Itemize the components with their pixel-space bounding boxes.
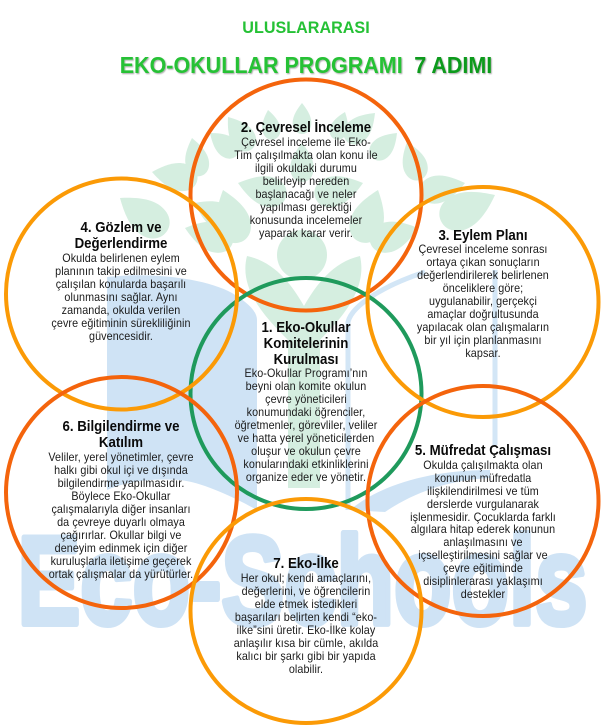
step 5 text: derslerde vurgulanarak (427, 499, 539, 511)
step 5 text: çevre eğitiminde (443, 563, 523, 575)
step 6 text: çalışmalarıyla diğer insanları (51, 504, 191, 516)
step 5 text: içselleştirilmesini sağlar ve (418, 550, 548, 562)
step 4 text (51, 218, 191, 343)
circle ring: step 1 (190, 278, 422, 509)
step 3 text (417, 226, 549, 360)
step 4 text: Okulda belirlenen eylem (62, 253, 180, 265)
step 4 text: güvencesidir. (89, 331, 153, 343)
step 1 text: oluşur ve okulun çevre (251, 446, 361, 458)
step 6 text: halkı gibi okul içi ve dışında (54, 465, 189, 477)
step 3 text: Çevresel inceleme sonrası (418, 244, 548, 256)
step 7 text: başarıları belirten kendi “eko- (235, 612, 377, 624)
background watermark: tree of leaves (110, 103, 503, 488)
step 5 text (410, 441, 556, 601)
step 6 text: bilgilendirme yapılmasıdır. (58, 478, 184, 490)
step 1 text: beyni olan komite okulun (246, 381, 366, 393)
step 7 text: değerlerini, ve öğrencilerin (242, 586, 370, 598)
step 6 text (48, 417, 194, 581)
step 1 text: ve hatta yerel yöneticilerden (238, 433, 374, 445)
step 4 text: çalışılan konularda başarılı (56, 279, 186, 291)
step 5 text: işlenmesidir. Çocuklarda farklı (410, 512, 556, 524)
step 5 text: ilişkilendirilmesi ve tüm (427, 486, 539, 498)
step 1 text: Komitelerinin (264, 334, 348, 351)
step 1 text: çevre yöneticileri (265, 394, 347, 406)
step 2 text: başlanacağı ve neler (255, 189, 357, 201)
step 4 text: Değerlendirme (75, 234, 168, 251)
step 3 text: bir yıl için planlanmasını (424, 335, 542, 347)
step 1 text: Eko-Okullar Programı’nın (245, 368, 367, 380)
step 4 text: zamanda, okulda verilen (62, 305, 180, 317)
step 6 text: Veliler, yerel yönetimler, çevre (48, 452, 194, 464)
step 3 text: kapsar. (465, 348, 501, 360)
step 1 text: öğretmenler, görevliler, veliler (235, 420, 378, 432)
step 1 text (235, 318, 378, 484)
step 6 text: çağırırlar. Okullar bilgi ve (61, 530, 181, 542)
circle ring: step 5 (368, 386, 598, 616)
step 6 text: ortak çalışmalar da yürütürler. (49, 569, 193, 581)
step 2 text: Tim çalışılmakta olan konu ile (234, 150, 378, 162)
title line: ULUSLARARASI: ULUSLARARASI (242, 18, 370, 37)
step 5 text: konunun müfredatla (435, 473, 532, 485)
step 3 text: yapılacak olan çalışmaların (417, 322, 549, 334)
step 1 text: Kurulması (274, 350, 338, 367)
step 2 text (234, 118, 378, 240)
step 3 text: amaçlar doğrultusunda (427, 309, 539, 321)
step 4 text: planının takip edilmesini ve (55, 266, 187, 278)
background watermark: open book (107, 270, 495, 512)
step 3 text: 3. Eylem Planı (438, 226, 528, 243)
circle ring: step 3 (368, 187, 598, 417)
step 1 text: konumundaki öğrenciler, (247, 407, 365, 419)
circle ring: step 4 (6, 178, 237, 410)
step 7 text: elde etmek istedikleri (255, 599, 357, 611)
step 5 text: 5. Müfredat Çalışması (415, 441, 551, 458)
step 7 text: 7. Eko-İlke (273, 554, 339, 571)
step 6 text: kuruluşlarla iletişime geçerek (51, 556, 192, 568)
circle ring: step 2 (190, 80, 422, 310)
step 3 text: uygulanabilir, gerçekçi (429, 296, 537, 308)
step 6 text: Böylece Eko-Okullar (71, 491, 171, 503)
step 1 text: 1. Eko-Okullar (261, 318, 351, 335)
step 1 text: konularındaki etkinliklerini (243, 459, 369, 471)
step 2 text: belirleyip nereden (263, 176, 349, 188)
step 5 text: anlaşılmasını ve (443, 537, 523, 549)
step 6 text: da çevreye duyarlı olmaya (57, 517, 186, 529)
step 5 text: algılara hitap ederek konunun (411, 524, 555, 536)
step 3 text: ortaya çıkan sonuçların (426, 257, 540, 269)
step 1 text: organize eder ve yönetir. (246, 472, 366, 484)
step 3 text: değerlendirilerek belirlenen (417, 270, 549, 282)
circle ring: step 6 (6, 377, 237, 608)
step 5 text: disiplinlerarası yaklaşımı (423, 576, 543, 588)
step 2 text: yapılması gerektiği (260, 202, 352, 214)
step 2 text: Çevresel inceleme ile Eko- (241, 137, 371, 149)
step 3 text: önceliklere göre; (443, 283, 523, 295)
step 2 text: 2. Çevresel İnceleme (241, 118, 371, 135)
step 5 text: destekler (461, 589, 505, 601)
circle ring: step 7 (190, 499, 422, 723)
step 4 text: çevre eğitiminin sürekliliğinin (51, 318, 191, 330)
step 7 text: kalıcı bir şarkı gibi bir yapıda (236, 651, 376, 663)
step 6 text: Katılım (99, 433, 143, 450)
step 4 text: 4. Gözlem ve (81, 218, 162, 235)
step 7 text: ilke”sini üretir. Eko-İlke kolay (237, 624, 376, 637)
step 4 text: olunmasını sağlar. Aynı (64, 292, 178, 304)
step 5 text: Okulda çalışılmakta olan (423, 460, 543, 472)
step 7 text (234, 554, 379, 676)
step 2 text: konusunda incelemeler (250, 215, 362, 227)
step 7 text: anlaşılır kısa bir cümle, akılda (234, 638, 379, 650)
step 2 text: yaparak karar verir. (259, 228, 353, 240)
step 6 text: deneyim edinmek için diğer (55, 543, 188, 555)
step 7 text: Her okul; kendi amaçlarını, (241, 573, 371, 585)
title (120, 18, 492, 78)
title line: EKO-OKULLAR PROGRAMI 7 ADIMI: EKO-OKULLAR PROGRAMI 7 ADIMI (120, 52, 492, 78)
step 6 text: 6. Bilgilendirme ve (62, 417, 180, 434)
step 2 text: ilgili okuldaki durumu (255, 163, 357, 175)
step 7 text: olabilir. (289, 664, 323, 676)
